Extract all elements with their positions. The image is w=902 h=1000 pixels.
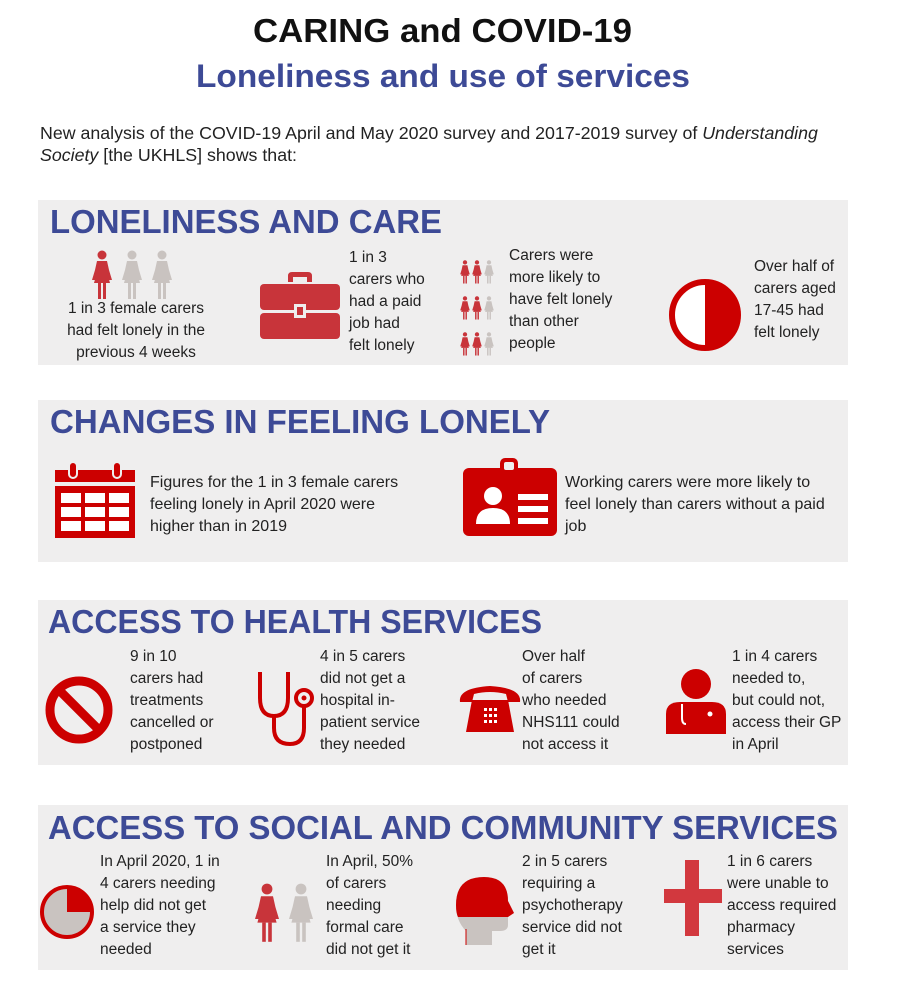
text: job had (349, 315, 400, 332)
text: 4 carers needing (100, 875, 215, 892)
text (522, 853, 623, 958)
title: CARING and COVID-19 (253, 12, 632, 49)
text (348, 249, 425, 354)
text (754, 258, 836, 341)
icon: id card (463, 458, 557, 536)
text: formal care (326, 919, 404, 936)
text: needed to, (732, 670, 805, 687)
text: Carers were (509, 247, 593, 264)
text: carers who (349, 271, 425, 288)
text: they needed (320, 736, 405, 753)
text: access their GP (732, 714, 841, 731)
text (326, 853, 413, 958)
text: previous 4 weeks (76, 344, 196, 361)
intro text: Society [the UKHLS] shows that: (40, 145, 297, 165)
text: carers aged (754, 280, 836, 297)
text: felt lonely (754, 324, 819, 341)
text: higher than in 2019 (150, 518, 287, 535)
text: have felt lonely (509, 291, 612, 308)
title: Loneliness and use of services (196, 58, 690, 94)
heading: CHANGES IN FEELING LONELY (50, 403, 550, 440)
icon: women (92, 250, 172, 299)
text: who needed (522, 692, 606, 709)
text: feel lonely than carers without a paid (565, 496, 825, 513)
text: 1 in 6 carers (727, 853, 812, 870)
text (509, 247, 612, 352)
intro text (40, 123, 818, 165)
icon: no sign (46, 676, 112, 744)
text: 1 in 3 female carers (68, 300, 204, 317)
icon: telephone (460, 686, 520, 732)
panel: changes in feeling lonely (38, 400, 848, 562)
text (100, 853, 220, 958)
text: felt lonely (349, 337, 414, 354)
text: in April (732, 736, 779, 753)
text (150, 474, 398, 535)
text: In April, 50% (326, 853, 413, 870)
text: access required (727, 897, 836, 914)
text: Over half (522, 648, 585, 665)
panel: loneliness and care (38, 200, 848, 365)
text: patient service (320, 714, 420, 731)
text (732, 648, 841, 753)
title (196, 12, 690, 94)
panel: access to health services (38, 600, 848, 765)
text (727, 853, 836, 958)
text: pharmacy (727, 919, 795, 936)
icon: head (456, 877, 514, 945)
text: but could not, (732, 692, 825, 709)
heading: LONELINESS AND CARE (50, 203, 442, 240)
text: psychotherapy (522, 897, 623, 914)
text: a service they (100, 919, 196, 936)
icon: half circle (669, 279, 741, 351)
text: treatments (130, 692, 203, 709)
text: Figures for the 1 in 3 female carers (150, 474, 398, 491)
text: feeling lonely in April 2020 were (150, 496, 375, 513)
text: In April 2020, 1 in (100, 853, 220, 870)
text: did not get it (326, 941, 410, 958)
text: needed (100, 941, 152, 958)
text: hospital in- (320, 692, 395, 709)
text: did not get a (320, 670, 405, 687)
text: had a paid (349, 293, 421, 310)
text: 17-45 had (754, 302, 824, 319)
icon: cross (664, 860, 722, 936)
intro text: New analysis of the COVID-19 April and May 2020 survey and 2017-2019 survey of Understanding (40, 123, 818, 143)
text (130, 648, 214, 753)
icon: groups (460, 260, 494, 356)
text: 2 in 5 carers (522, 853, 607, 870)
text: of carers (326, 875, 386, 892)
icon: briefcase (260, 272, 340, 339)
text (522, 648, 620, 753)
icon: two women (255, 884, 313, 942)
heading: ACCESS TO SOCIAL AND COMMUNITY SERVICES (48, 809, 838, 846)
icon: calendar (55, 463, 135, 538)
text: Working carers were more likely to (565, 474, 810, 491)
text: cancelled or (130, 714, 214, 731)
text: Over half of (754, 258, 834, 275)
text: service did not (522, 919, 622, 936)
text: of carers (522, 670, 582, 687)
text: services (727, 941, 784, 958)
heading: ACCESS TO HEALTH SERVICES (48, 603, 542, 640)
text (564, 474, 825, 535)
icon: doctor (666, 669, 726, 734)
text: requiring a (522, 875, 595, 892)
text: postponed (130, 736, 202, 753)
text: 1 in 4 carers (732, 648, 817, 665)
text: 4 in 5 carers (320, 648, 405, 665)
text: people (509, 335, 556, 352)
text: get it (522, 941, 556, 958)
text: not access it (522, 736, 608, 753)
text: carers had (130, 670, 203, 687)
text: than other (509, 313, 579, 330)
icon: stethoscope (258, 672, 314, 746)
panel: access to social and community services (38, 805, 848, 970)
text: more likely to (509, 269, 600, 286)
text: 1 in 3 (349, 249, 387, 266)
text: job (565, 518, 586, 535)
text: needing (326, 897, 381, 914)
text: 9 in 10 (130, 648, 177, 665)
text (67, 300, 205, 361)
text: were unable to (727, 875, 829, 892)
text: had felt lonely in the (67, 322, 205, 339)
icon: pie (40, 885, 94, 939)
text: help did not get (100, 897, 206, 914)
text (320, 648, 420, 753)
text: NHS111 could (522, 714, 620, 731)
